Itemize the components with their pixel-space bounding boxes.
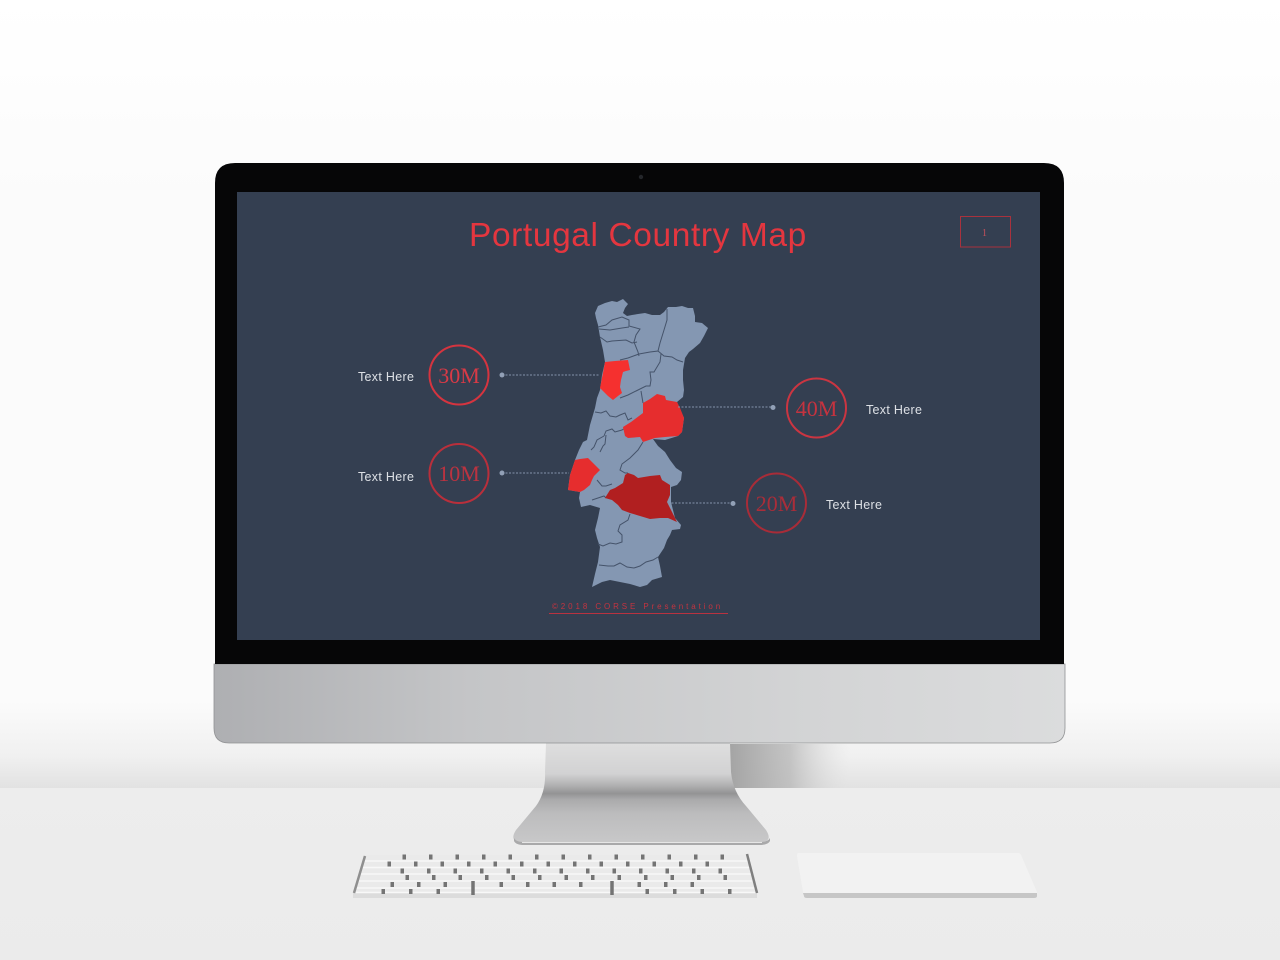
label: Text Here: Text Here (358, 470, 414, 484)
page number box (960, 216, 1010, 247)
slide screen (237, 192, 1040, 640)
leader line (668, 501, 736, 506)
region highlight: 40M (623, 394, 684, 442)
camera (639, 175, 643, 179)
circle: 10M (430, 444, 488, 503)
value: 10M: 10M (438, 461, 480, 486)
map base (568, 299, 708, 587)
circle: 30M (430, 346, 488, 404)
monitor body (214, 163, 1065, 743)
Portugal map (568, 299, 708, 587)
monitor chin (214, 664, 1065, 743)
region borders (591, 309, 683, 568)
callout: 20M (668, 474, 882, 532)
slide title: Portugal Country Map (469, 217, 807, 254)
callout: 30M (358, 346, 600, 404)
circle: 20M (747, 474, 806, 532)
callout: 10M (358, 444, 569, 503)
circle: 40M (787, 378, 846, 438)
label: Text Here: Text Here (358, 370, 414, 384)
region highlight: 20M (605, 473, 677, 522)
monitor stand (513, 743, 770, 845)
value: 30M: 30M (438, 363, 480, 388)
leader line (500, 372, 600, 378)
footer credit: ©2018 CORSE Presentation (552, 602, 723, 611)
keyboard (353, 854, 757, 898)
stand shadow on wall (730, 744, 852, 788)
callout: 40M (678, 378, 922, 438)
desk surface (0, 788, 1280, 960)
region highlight: 10M (568, 458, 600, 492)
leader line (500, 470, 569, 476)
page number box: 1 (982, 228, 987, 239)
label: Text Here: Text Here (826, 498, 882, 512)
value: 20M: 20M (756, 491, 797, 516)
monitor bezel (215, 163, 1064, 664)
label: Text Here: Text Here (866, 403, 922, 417)
region highlight: 30M (600, 360, 630, 400)
leader line (678, 405, 776, 410)
trackpad (797, 853, 1037, 898)
value: 40M: 40M (796, 396, 837, 421)
